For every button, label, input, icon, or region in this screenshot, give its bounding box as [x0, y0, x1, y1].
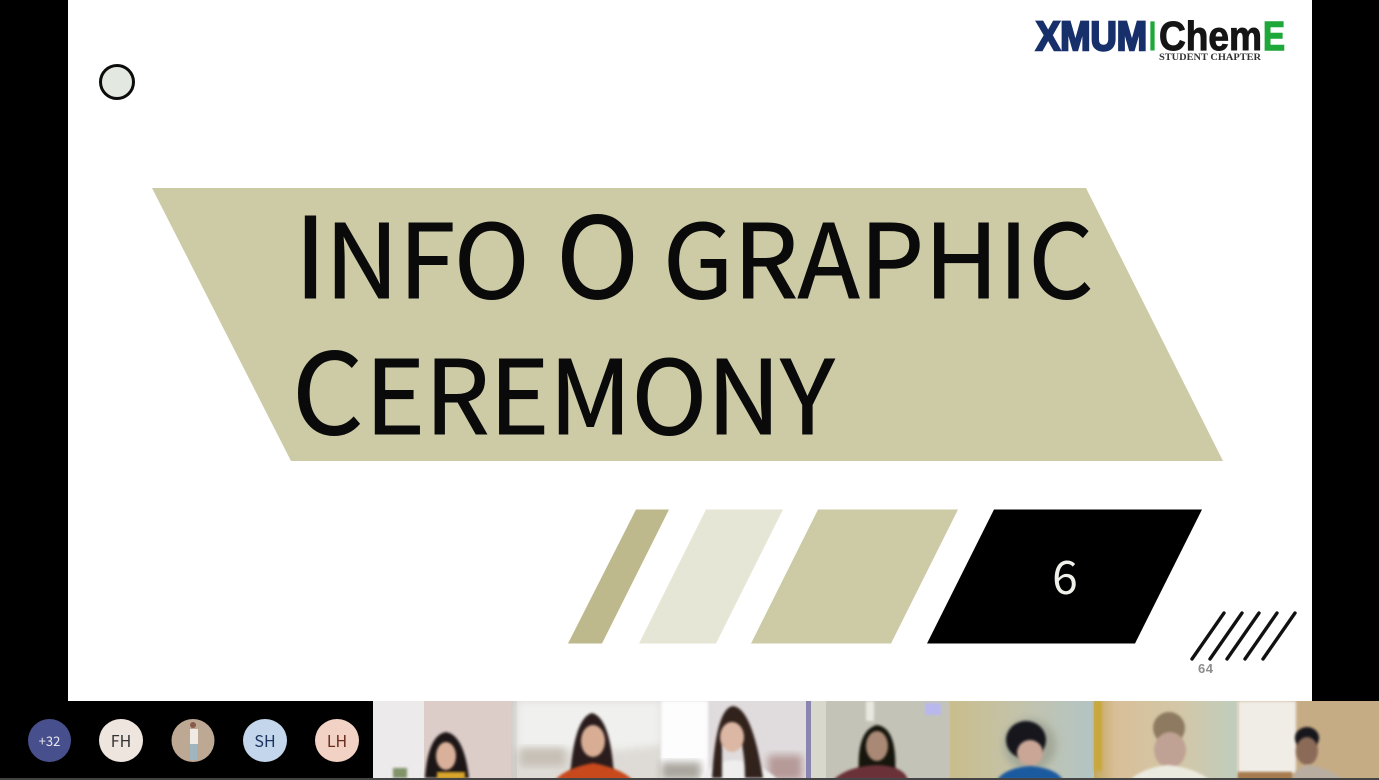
logo: XMUM ChemE student chapter: XMUM — [1036, 14, 1147, 59]
avatar: +32 — [28, 719, 71, 762]
title: Info O Graphic Ceremony — [292, 200, 1093, 445]
page number: 64 — [1198, 661, 1213, 676]
participant avatars — [0, 701, 373, 780]
avatar: +32: +32 — [39, 731, 60, 750]
logo: XMUM ChemE student chapter: STUDENT CHAPTER — [1159, 53, 1261, 63]
participant video strip — [373, 701, 1379, 778]
bottom edge line — [0, 778, 1379, 780]
video tile 2 — [517, 701, 661, 780]
logo: XMUM ChemE student chapter — [1034, 14, 1285, 63]
logo: XMUM ChemE student chapter: I — [1149, 14, 1156, 59]
video tile 4 — [806, 701, 950, 780]
video tile 7 — [1238, 701, 1379, 780]
decorative parallelograms with number 6: 6 — [1052, 542, 1078, 608]
video tile 5 — [950, 701, 1094, 780]
avatar: SH — [243, 719, 287, 762]
avatar: LH: LH — [327, 728, 347, 752]
icon: five diagonal stripes — [1190, 611, 1297, 661]
video tile 3 — [661, 701, 806, 780]
icon: pointer circle — [99, 64, 135, 100]
logo: XMUM ChemE student chapter: E — [1263, 14, 1285, 59]
avatar: SH: SH — [254, 728, 276, 752]
logo: XMUM ChemE student chapter: Chem — [1159, 14, 1262, 59]
video tile 1 — [373, 701, 517, 780]
avatar: FH: FH — [111, 728, 131, 752]
video tile 6 — [1094, 701, 1238, 780]
avatar: LH — [315, 719, 359, 762]
avatar: FH — [99, 719, 143, 762]
decorative parallelograms with number 6 — [568, 510, 1202, 644]
avatar: photo — [172, 719, 214, 762]
